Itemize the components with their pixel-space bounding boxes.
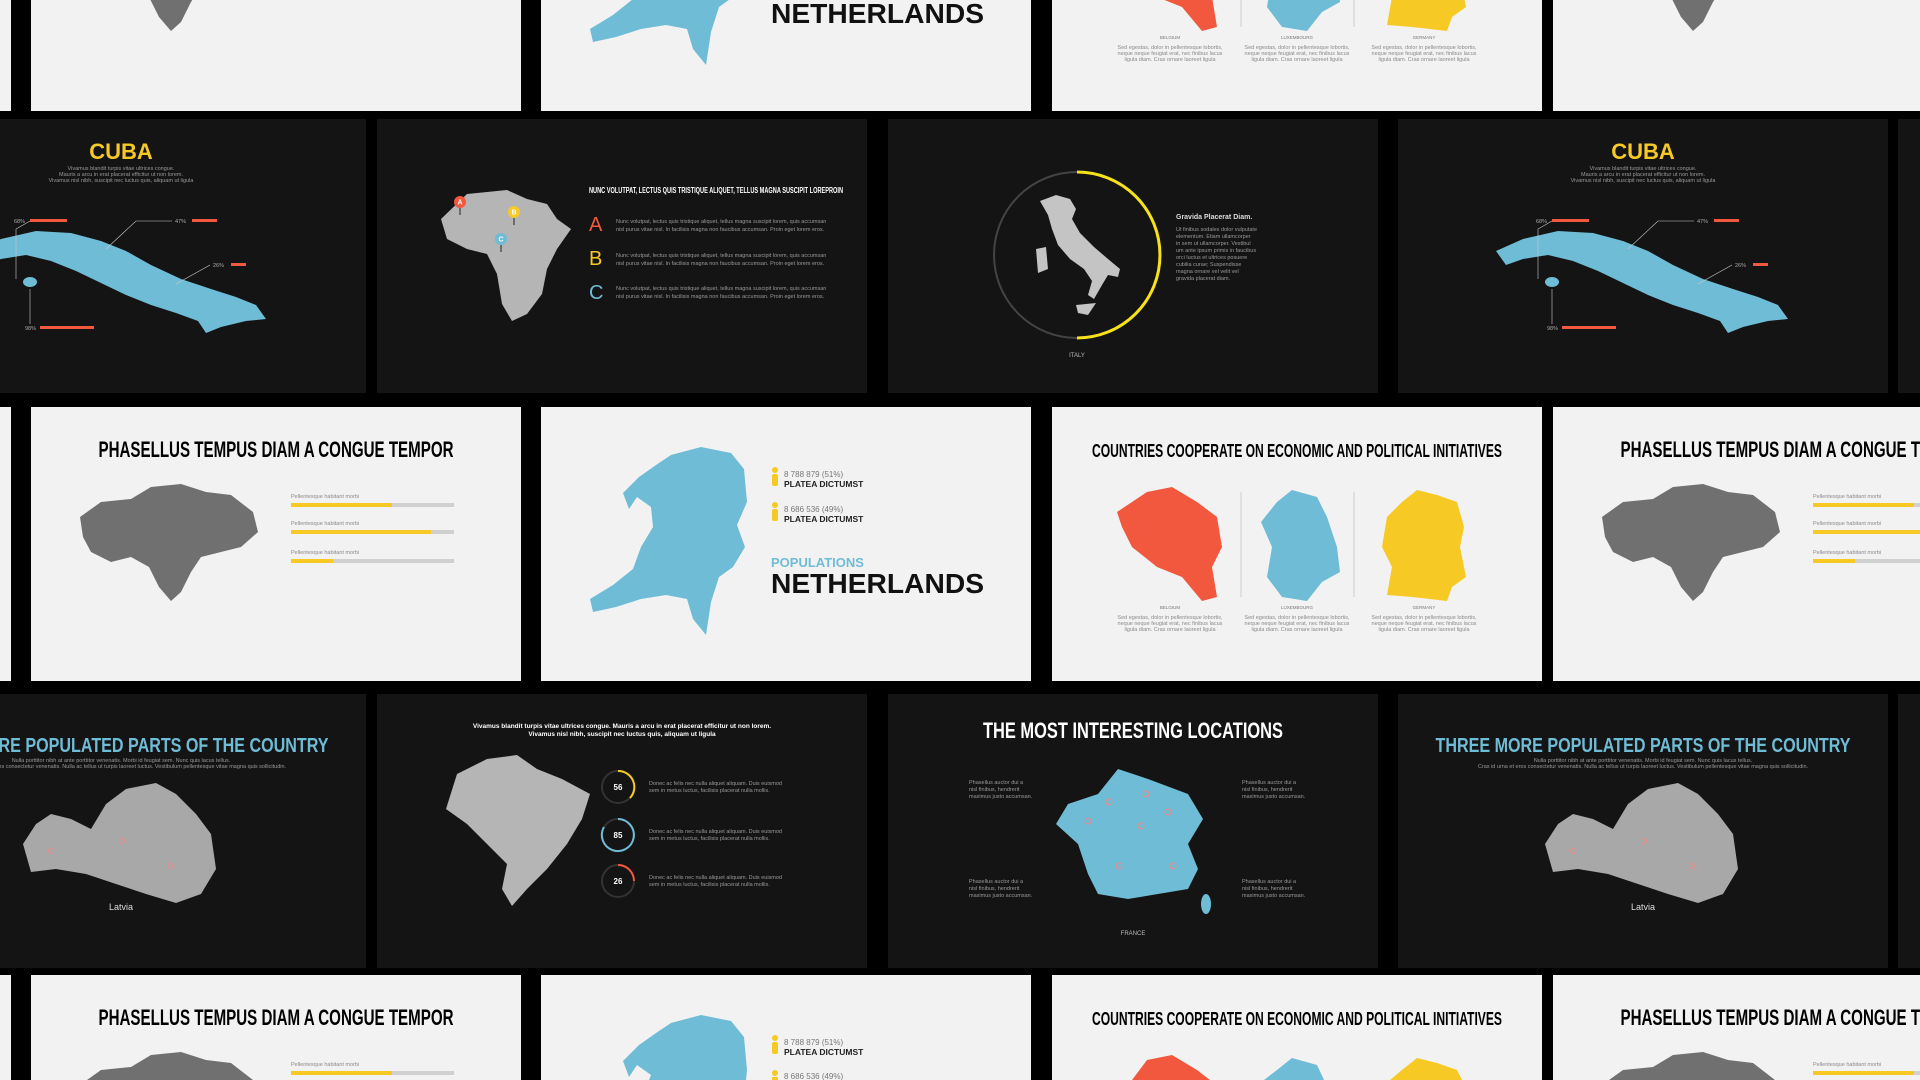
panel: countries (row0 col2): ligula diam. Cras ornare laoreet ligula <box>1124 57 1216 63</box>
panel: countries (row2 col2): COUNTRIES COOPERATE ON ECONOMIC AND POLITICAL INITIATIVES <box>1092 441 1502 461</box>
panel: cuba (row1 col0): CUBA <box>89 139 153 164</box>
panel: countries (row2 col2): neque neque feugiat erat, nec finibus lacus <box>1372 621 1477 627</box>
panel: france (row3 col2) <box>888 694 1378 968</box>
panel: brazil (row3 col1): 85 <box>614 831 623 840</box>
panel: countries (row0 col2): neque neque feugiat erat, nec finibus lacus <box>1245 51 1350 57</box>
panel: countries (row2 col2) <box>1052 407 1542 681</box>
panel: africa (row1 col1): A <box>457 200 463 206</box>
panel: ukraine (row4 col3) <box>1553 975 1920 1080</box>
panel: france (row3 col2): Phasellus auctor dui a <box>969 879 1024 885</box>
panel: africa (row1 col1): C <box>589 282 603 304</box>
panel: italy (row1 col2): magna ornare vel velit vel <box>1176 269 1239 275</box>
panel: brazil (row3 col1): Donec ac felis nec nulla aliquet aliquam. Duis euismod <box>649 829 782 835</box>
panel: france (row3 col2): Phasellus auctor dui a <box>969 780 1024 786</box>
panel: countries (row0 col2): Sed egestas, dolor in pellentesque lobortis, <box>1117 45 1223 51</box>
panel: brazil (row3 col1): sem in metus luctus, facilisis placerat nulla mollis. <box>649 882 770 888</box>
panel: italy (row1 col2): elementum. Etiam ullamcorper <box>1176 234 1251 240</box>
panel: france (row3 col2): maximus justo accumsan. <box>969 794 1033 800</box>
panel: brazil (row3 col1): Donec ac felis nec nulla aliquet aliquam. Duis euismod <box>649 781 782 787</box>
panel: ukraine bars (row2 col0): Pellentesque habitant morbi <box>291 550 359 556</box>
panel: ukraine bars (row0 col0) <box>31 0 521 111</box>
panel: countries (row2 col2): LUXEMBOURG <box>1281 605 1313 610</box>
panel: italy (row1 col2): ITALY <box>1069 353 1085 359</box>
panel: france (row3 col2): nisl finibus, hendrerit <box>1242 886 1293 892</box>
panel: countries (row0 col2): GERMANY <box>1413 35 1435 40</box>
panel: latvia (row3 col0): Latvia <box>109 902 133 912</box>
panel: netherlands (row4 col1): PLATEA DICTUMST <box>784 1047 864 1057</box>
panel: cuba (row1 col3): Vivamus blandit turpis vitae ultrices congue. <box>1590 166 1697 172</box>
panel: africa (row1 col1): NUNC VOLUTPAT, LECTUS QUIS TRISTIQUE ALIQUET, TELLUS MAGNA SUSCIPIT LOREPROIN <box>589 186 843 195</box>
panel: netherlands (row4 col1) <box>541 975 1031 1080</box>
panel: cuba (row1 col0) <box>0 119 366 393</box>
panel: brazil (row3 col1) <box>377 694 867 968</box>
panel: ukraine (row4 col3): Pellentesque habitant morbi <box>1813 1062 1881 1068</box>
panel: cuba (row1 col3): 26% <box>1735 263 1746 269</box>
panel: cuba (row1 col0): 98% <box>25 326 36 332</box>
panel: latvia (row3 col3) <box>1398 694 1888 968</box>
panel: countries (row0 col2): LUXEMBOURG <box>1281 35 1313 40</box>
panel: france (row3 col2): nisl finibus, hendrerit <box>969 787 1020 793</box>
panel: ukraine (row4 col0): Pellentesque habitant morbi <box>291 1062 359 1068</box>
panel: netherlands (row2 col1): 8 788 879 (51%) <box>784 470 843 479</box>
panel: cuba (row1 col3): 68% <box>1536 219 1547 225</box>
panel: netherlands (row4 col1): 8 788 879 (51%) <box>784 1038 843 1047</box>
row 3: dark slides <box>0 694 1920 968</box>
panel: cuba (row1 col3): CUBA <box>1611 139 1675 164</box>
panel: africa (row1 col1): nisl purus vitae nisl. In facilisis magna non faucibus accumsan. Proin eget lorem eros. <box>616 294 825 300</box>
panel: latvia (row3 col0): Nulla porttitor nibh at ante porttitor venenatis. Morbi id feugiat sem. Nunc quis lacus tellus. <box>12 758 231 764</box>
panel: italy (row1 col2): Ut finibus sodales dolor vulputate <box>1176 227 1257 233</box>
panel: cuba (row1 col0): 47% <box>175 219 186 225</box>
panel: ukraine (row4 col0): PHASELLUS TEMPUS DIAM A CONGUE TEMPOR <box>98 1005 454 1030</box>
panel: countries (row0 col2): Sed egestas, dolor in pellentesque lobortis, <box>1371 45 1477 51</box>
panel: ukraine bars (row2 col0): PHASELLUS TEMPUS DIAM A CONGUE TEMPOR <box>98 437 454 462</box>
panel: countries (row2 col2): ligula diam. Cras ornare laoreet ligula <box>1378 627 1470 633</box>
panel: netherlands (row2 col1): POPULATIONS <box>771 555 864 570</box>
panel: italy (row1 col2): Gravida Placerat Diam. <box>1176 214 1252 221</box>
panel: ukraine bars (row2 col3) <box>1553 407 1920 681</box>
panel: france (row3 col2): nisl finibus, hendrerit <box>1242 787 1293 793</box>
panel: france (row3 col2): FRANCE <box>1121 931 1145 937</box>
panel: countries (row0 col2) <box>1052 0 1542 111</box>
panel: countries (row2 col2): ligula diam. Cras ornare laoreet ligula <box>1251 627 1343 633</box>
panel: netherlands (row0 col1) <box>541 0 1031 111</box>
panel: cuba (row1 col0): Mauris a arcu in erat placerat efficitur ut non lorem. <box>59 172 183 178</box>
row 4: light slides (top parts) <box>0 975 1920 1080</box>
panel: italy (row1 col2): in sem ut ullamcorper. Vestibul <box>1176 241 1251 247</box>
panel: france (row3 col2): THE MOST INTERESTING LOCATIONS <box>983 718 1283 743</box>
panel: countries (row0 col2): neque neque feugiat erat, nec finibus lacus <box>1372 51 1477 57</box>
panel: africa (row1 col1) <box>377 119 867 393</box>
panel: countries (row2 col2): neque neque feugiat erat, nec finibus lacus <box>1118 621 1223 627</box>
panel: netherlands (row2 col1) <box>541 407 1031 681</box>
panel: italy (row1 col2): cubilia curae; Suspendisse <box>1176 262 1241 268</box>
panel: ukraine bars (row2 col3): Pellentesque habitant morbi <box>1813 550 1881 556</box>
panel: cuba (row1 col0): Vivamus nisl nibh, suscipit nec luctus quis, aliquam ut ligula <box>49 178 194 184</box>
panel: countries (row0 col2): neque neque feugiat erat, nec finibus lacus <box>1118 51 1223 57</box>
panel: italy (row1 col2): um ante ipsum primis in faucibus <box>1176 248 1256 254</box>
panel: ukraine bars (row2 col0): Pellentesque habitant morbi <box>291 494 359 500</box>
panel: africa (row1 col1): B <box>589 248 602 270</box>
panel: brazil (row3 col1): 56 <box>614 783 623 792</box>
panel: ukraine bars (row2 col0): Pellentesque habitant morbi <box>291 521 359 527</box>
panel: cuba (row1 col3): 47% <box>1697 219 1708 225</box>
panel: brazil (row3 col1): sem in metus luctus, facilisis placerat nulla mollis. <box>649 836 770 842</box>
panel: latvia (row3 col3): Latvia <box>1631 902 1655 912</box>
panel: countries (row2 col2): Sed egestas, dolor in pellentesque lobortis, <box>1117 615 1223 621</box>
panel: africa (row1 col1): A <box>589 214 603 236</box>
panel: france (row3 col2): maximus justo accumsan. <box>1242 893 1306 899</box>
panel: countries (row0 col2): BELGIUM <box>1160 35 1180 40</box>
panel: brazil (row3 col1): Donec ac felis nec nulla aliquet aliquam. Duis euismod <box>649 875 782 881</box>
panel: countries (row2 col2): GERMANY <box>1413 605 1435 610</box>
panel: latvia (row3 col3): Nulla porttitor nibh at ante porttitor venenatis. Morbi id feugiat sem. Nunc quis lacus tellus. <box>1534 758 1753 764</box>
panel: countries (row0 col2): Sed egestas, dolor in pellentesque lobortis, <box>1244 45 1350 51</box>
panel: cuba (row1 col3): 98% <box>1547 326 1558 332</box>
panel: italy (row1 col2): orci luctus et ultrices posuere <box>1176 255 1247 261</box>
panel: countries (row2 col2): neque neque feugiat erat, nec finibus lacus <box>1245 621 1350 627</box>
panel: france (row3 col2): Phasellus auctor dui a <box>1242 879 1297 885</box>
panel: africa (row1 col1): Nunc volutpat, lectus quis tristique aliquet, tellus magna suscipit lorem, quis accumsan <box>616 286 826 292</box>
panel: france (row3 col2): Phasellus auctor dui a <box>1242 780 1297 786</box>
panel: brazil (row3 col1): Vivamus blandit turpis vitae ultrices congue. Mauris a arcu in erat placerat efficitur ut non lorem. <box>473 723 771 730</box>
panel: africa (row1 col1): nisl purus vitae nisl. In facilisis magna non faucibus accumsan. Proin eget lorem eros. <box>616 261 825 267</box>
panel: brazil (row3 col1): sem in metus luctus, facilisis placerat nulla mollis. <box>649 788 770 794</box>
panel: france (row3 col2): maximus justo accumsan. <box>1242 794 1306 800</box>
panel: netherlands (row2 col1): 8 686 536 (49%) <box>784 505 843 514</box>
panel: ukraine (row4 col0) <box>31 975 521 1080</box>
panel: countries (row2 col2): ligula diam. Cras ornare laoreet ligula <box>1124 627 1216 633</box>
panel: countries (row2 col2): Sed egestas, dolor in pellentesque lobortis, <box>1371 615 1477 621</box>
panel: latvia (row3 col3): Cras id urna et eros consectetur venenatis. Nulla ac tellus ut turpis laoreet luctus. Vestibulum pellentesque vitae magna quis sollicitudin. <box>1478 764 1809 770</box>
row 1: dark slides <box>0 119 1920 393</box>
panel: cuba (row1 col0): 26% <box>213 263 224 269</box>
panel: ukraine (row0 col3) <box>1553 0 1920 111</box>
panel: brazil (row3 col1): 26 <box>614 877 623 886</box>
panel: italy (row1 col2): gravida placerat diam. <box>1176 276 1231 282</box>
panel: africa (row1 col1): C <box>498 236 504 244</box>
panel: countries (row0 col2): ligula diam. Cras ornare laoreet ligula <box>1251 57 1343 63</box>
panel: countries (row2 col2): BELGIUM <box>1160 605 1180 610</box>
panel: france (row3 col2): nisl finibus, hendrerit <box>969 886 1020 892</box>
panel: france (row3 col2): maximus justo accumsan. <box>969 893 1033 899</box>
row 2: light slides <box>0 407 1920 681</box>
row 0: light slides (bottom parts) <box>0 0 1920 111</box>
panel: africa (row1 col1): B <box>511 210 517 216</box>
panel: netherlands (row2 col1): PLATEA DICTUMST <box>784 479 864 489</box>
panel: countries (row4 col2): COUNTRIES COOPERATE ON ECONOMIC AND POLITICAL INITIATIVES <box>1092 1009 1502 1029</box>
panel: africa (row1 col1): nisl purus vitae nisl. In facilisis magna non faucibus accumsan. Proin eget lorem eros. <box>616 227 825 233</box>
panel: netherlands (row2 col1): NETHERLANDS <box>771 568 984 599</box>
panel: cuba (row1 col3): Vivamus nisl nibh, suscipit nec luctus quis, aliquam ut ligula <box>1571 178 1716 184</box>
panel: countries (row2 col2): Sed egestas, dolor in pellentesque lobortis, <box>1244 615 1350 621</box>
panel: italy (row1 col2) <box>888 119 1378 393</box>
panel: africa (row1 col1): Nunc volutpat, lectus quis tristique aliquet, tellus magna suscipit lorem, quis accumsan <box>616 253 826 259</box>
panel: brazil (row3 col1): Vivamus nisl nibh, suscipit nec luctus quis, aliquam ut ligula <box>528 731 716 738</box>
panel: ukraine bars (row2 col0) <box>31 407 521 681</box>
panel: countries (row0 col2): ligula diam. Cras ornare laoreet ligula <box>1378 57 1470 63</box>
panel: cuba (row1 col3) <box>1398 119 1888 393</box>
panel: netherlands (row2 col1): PLATEA DICTUMST <box>784 514 864 524</box>
panel: cuba (row1 col0): Vivamus blandit turpis vitae ultrices congue. <box>68 166 175 172</box>
panel: latvia (row3 col0) <box>0 694 366 968</box>
panel: africa (row1 col1): Nunc volutpat, lectus quis tristique aliquet, tellus magna suscipit lorem, quis accumsan <box>616 219 826 225</box>
panel: cuba (row1 col3): Mauris a arcu in erat placerat efficitur ut non lorem. <box>1581 172 1705 178</box>
panel: ukraine bars (row2 col3): Pellentesque habitant morbi <box>1813 494 1881 500</box>
panel: countries (row4 col2) <box>1052 975 1542 1080</box>
panel: ukraine bars (row2 col3): Pellentesque habitant morbi <box>1813 521 1881 527</box>
panel: cuba (row1 col0): 68% <box>14 219 25 225</box>
